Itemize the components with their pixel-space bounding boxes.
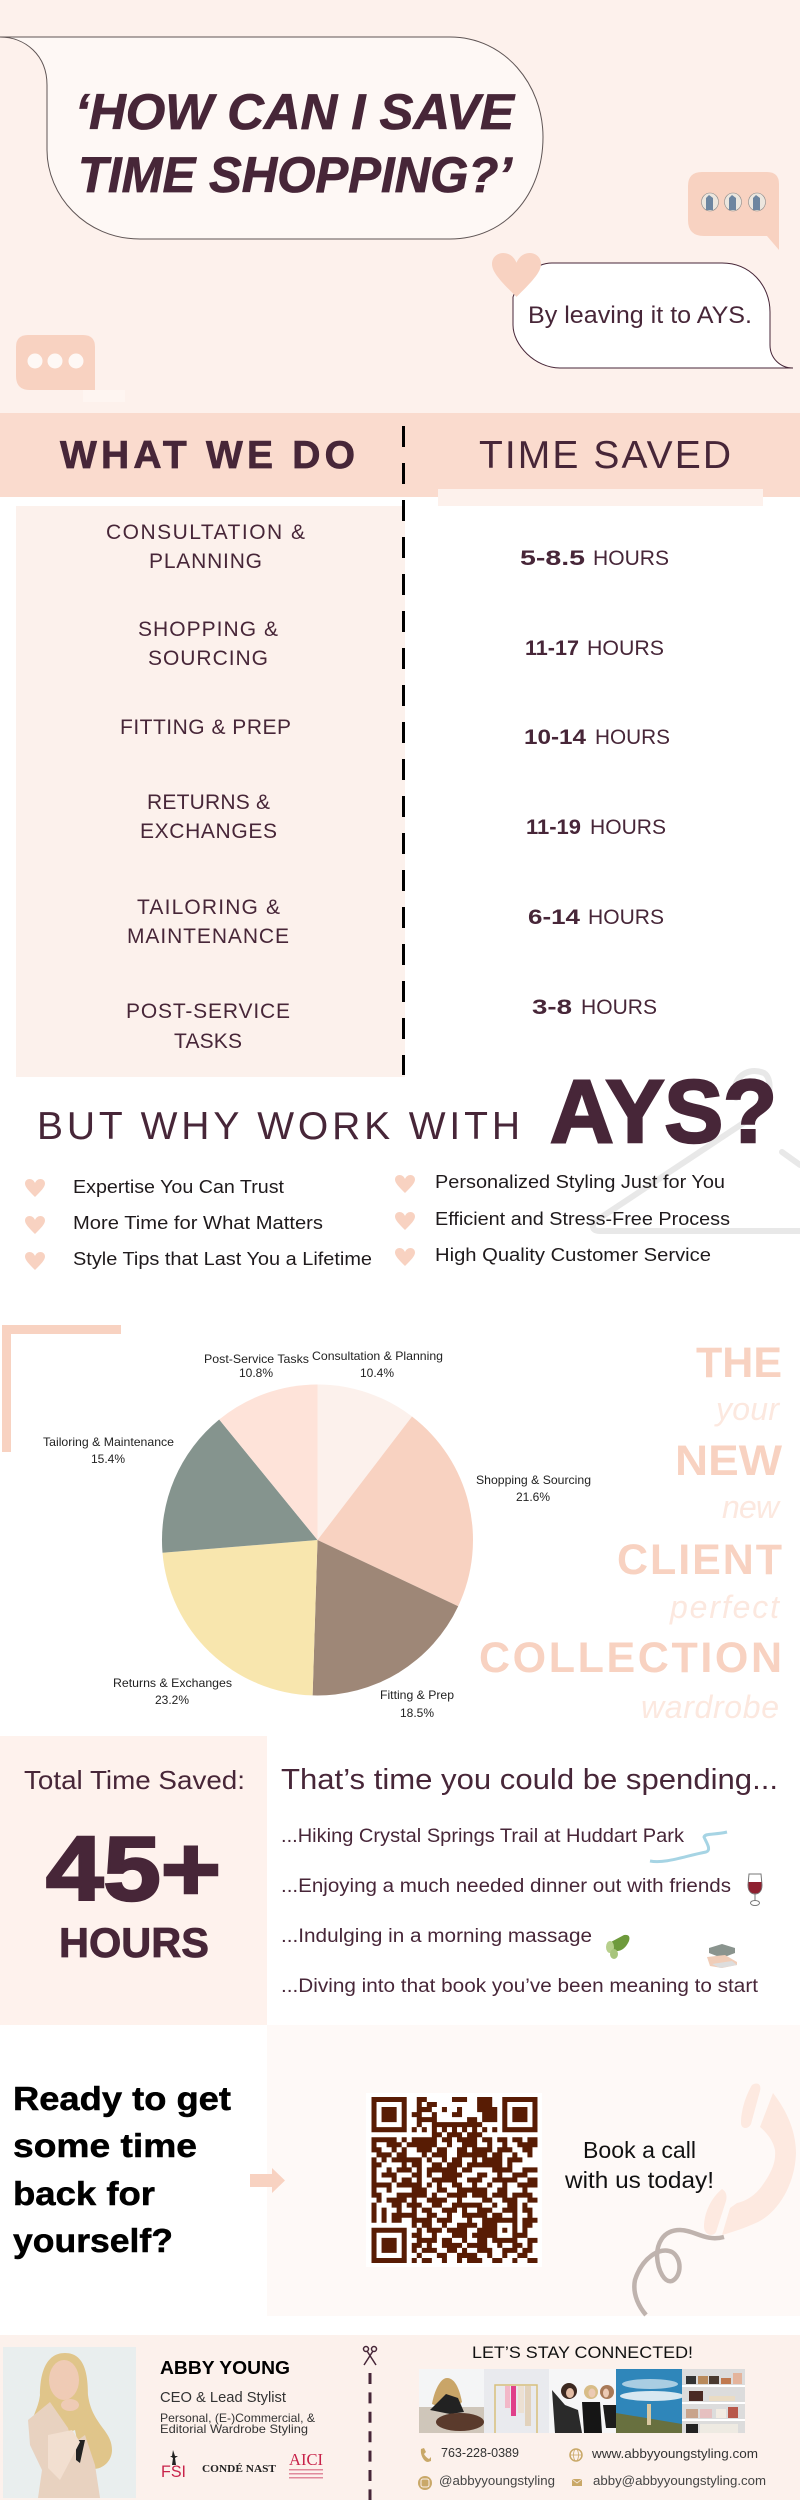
panel: total time saved	[0, 1736, 267, 2025]
text: book a call	[564, 2137, 714, 2193]
text: name and title: Editorial Wardrobe Styling	[160, 2422, 308, 2436]
heading: but why work with: BUT WHY WORK WITH	[37, 1105, 520, 1148]
service: post-service: TASKS	[174, 1030, 242, 1053]
icon: large heart	[492, 253, 541, 297]
speech bubble: main title	[0, 37, 543, 239]
service: shopping: SOURCING	[148, 647, 268, 670]
list: activities: ...Diving into that book you’ve been meaning to start	[281, 1976, 759, 1997]
service: tailoring	[127, 896, 289, 948]
pie labels: Post-Service Tasks	[204, 1352, 309, 1366]
hours: shopping: HOURS	[587, 637, 664, 660]
pie labels: Consultation & Planning	[312, 1349, 443, 1363]
contact: phone: 763-228-0389	[441, 2445, 519, 2460]
contact: phone	[421, 2445, 519, 2462]
hours: tailoring	[528, 906, 664, 929]
icon: telephone cord	[634, 2230, 724, 2315]
stat: 45+: 45+	[46, 1819, 221, 1920]
call to action text: Ready to get	[13, 2080, 231, 2117]
service: shopping	[138, 618, 278, 670]
icon: telephone handset	[704, 2083, 796, 2235]
hours: post-service: HOURS	[581, 996, 657, 1019]
text block: the new client collection: CLIENT	[617, 1536, 782, 1584]
hours: fitting: HOURS	[595, 726, 670, 749]
speech bubble: answer	[513, 263, 793, 368]
reason 4: Personalized Styling Just for You	[435, 1172, 725, 1192]
pie labels: 15.4%	[91, 1452, 125, 1466]
text block: the new client collection: COLLECTION	[479, 1634, 782, 1682]
contact: website: www.abbyyoungstyling.com	[591, 2446, 758, 2461]
hours: fitting	[524, 726, 670, 749]
hours: returns: HOURS	[590, 816, 666, 839]
icon: wine glass	[748, 1874, 762, 1906]
service: consultation: CONSULTATION &	[106, 521, 305, 544]
hours: tailoring: 6-14	[528, 906, 580, 929]
icon: scissors	[364, 2346, 376, 2365]
panel: hero background	[0, 0, 800, 413]
service: post-service	[126, 1000, 290, 1053]
text block: the new client collection: wardrobe	[641, 1689, 779, 1725]
heading: AYS: AYS?	[550, 1061, 777, 1161]
icon: books	[707, 1944, 737, 1968]
qr code	[366, 2093, 542, 2267]
hours: shopping	[525, 637, 664, 660]
title: TIME SHOPPING?’	[78, 147, 513, 203]
call to action text: some time	[13, 2127, 197, 2164]
pie labels: Fitting & Prep	[380, 1688, 454, 1702]
photo: stylist with dog	[419, 2369, 484, 2433]
photo: shoe shelves	[682, 2369, 745, 2433]
text block: the new client collection: new	[722, 1489, 781, 1525]
panel: qr background	[267, 2025, 800, 2316]
list: activities	[281, 1826, 759, 1997]
photo: group selfie	[549, 2369, 616, 2433]
decorative bracket	[2, 1325, 121, 1452]
service: fitting: FITTING & PREP	[120, 716, 291, 739]
reason 5: Efficient and Stress-Free Process	[435, 1209, 730, 1229]
text block: the new client collection: your	[714, 1391, 780, 1427]
contact: instagram: @abbyyoungstyling	[439, 2473, 555, 2488]
list: reasons	[25, 1172, 730, 1270]
title	[75, 84, 516, 203]
pie labels: Tailoring & Maintenance	[43, 1435, 174, 1449]
service: consultation: PLANNING	[149, 550, 262, 573]
reason 3: Style Tips that Last You a Lifetime	[73, 1249, 372, 1269]
pie labels: 10.8%	[239, 1366, 273, 1380]
text: book a call: Book a call	[583, 2137, 696, 2163]
service: tailoring: TAILORING &	[137, 896, 280, 919]
hours: consultation: HOURS	[593, 547, 669, 570]
photo strip	[419, 2369, 745, 2433]
logo: AICI: AICI	[289, 2450, 323, 2469]
logo: FSI	[161, 2450, 186, 2481]
hours: post-service	[532, 996, 657, 1019]
pie labels: Returns & Exchanges	[113, 1676, 232, 1690]
list: activities: ...Hiking Crystal Springs Trail at Huddart Park	[281, 1826, 685, 1847]
column: hours saved	[520, 547, 670, 1019]
text block: the new client collection: THE	[696, 1339, 782, 1387]
pie labels: 21.6%	[516, 1490, 550, 1504]
speech bubble: answer: By leaving it to AYS.	[528, 302, 752, 329]
panel: table header band	[0, 413, 800, 506]
text: name and title: Personal, (E-)Commercial, &	[160, 2411, 315, 2425]
service: consultation	[106, 521, 305, 573]
call to action text	[13, 2080, 231, 2259]
service: returns: RETURNS &	[147, 791, 270, 814]
pie labels: 23.2%	[155, 1693, 189, 1707]
icon: chat bubble with photo dots	[688, 172, 779, 250]
list: activities: ...Indulging in a morning massage	[281, 1926, 592, 1947]
hours: fitting: 10-14	[524, 726, 586, 749]
call to action text: yourself?	[13, 2222, 173, 2259]
text: name and title: CEO & Lead Stylist	[160, 2389, 287, 2406]
panel: footer background	[0, 2335, 800, 2500]
heading: time saved: TIME SAVED	[479, 434, 731, 477]
call to action text: back for	[13, 2175, 155, 2212]
logo: Conde Nast: CONDÉ NAST	[202, 2463, 276, 2475]
hours: consultation: 5-8.5	[520, 547, 585, 570]
icon: river trail	[650, 1832, 727, 1862]
list: activities: ...Enjoying a much needed dinner out with friends	[281, 1876, 731, 1897]
text block: the new client collection: perfect	[669, 1589, 780, 1625]
panel: total time saved: Total Time Saved:	[24, 1765, 245, 1795]
text: name and title	[160, 2358, 315, 2436]
heading: what we do: WHAT WE DO	[60, 434, 355, 477]
text: book a call: with us today!	[564, 2167, 714, 2193]
hours: consultation	[520, 547, 669, 570]
arrow	[250, 2168, 285, 2193]
title: ‘HOW CAN I SAVE	[75, 84, 516, 140]
pie chart	[43, 1349, 591, 1720]
hours: post-service: 3-8	[532, 996, 572, 1019]
service: shopping: SHOPPING &	[138, 618, 278, 641]
hours: returns	[526, 816, 666, 839]
stat label: hours: HOURS	[59, 1919, 209, 1966]
pie labels: 18.5%	[400, 1706, 434, 1720]
panel: services list	[16, 506, 405, 1077]
hours: returns: 11-19	[526, 816, 581, 839]
hours: tailoring: HOURS	[588, 906, 664, 929]
logo: AICI	[289, 2450, 323, 2478]
pie labels: Shopping & Sourcing	[476, 1473, 591, 1487]
service: tailoring: MAINTENANCE	[127, 925, 289, 948]
reason 6: High Quality Customer Service	[435, 1245, 711, 1265]
photo: person under sky	[616, 2369, 684, 2433]
text block: the new client collection: NEW	[675, 1437, 782, 1485]
reason 2: More Time for What Matters	[73, 1213, 323, 1233]
icon: typing bubble	[16, 335, 125, 402]
photo: Abby Young portrait	[3, 2347, 136, 2498]
service: post-service: POST-SERVICE	[126, 1000, 290, 1023]
hours: shopping: 11-17	[525, 637, 579, 660]
icon: hanger	[593, 1071, 800, 1231]
pie labels: 10.4%	[360, 1366, 394, 1380]
service: returns: EXCHANGES	[140, 820, 277, 843]
reason 1: Expertise You Can Trust	[73, 1177, 284, 1197]
heading: stay connected: LET’S STAY CONNECTED!	[472, 2343, 693, 2362]
service: returns	[140, 791, 277, 843]
photo: clothing rack	[484, 2369, 549, 2433]
icon: cucumber	[606, 1935, 629, 1959]
contact: email: abby@abbyyoungstyling.com	[593, 2473, 766, 2488]
pie labels	[43, 1349, 591, 1720]
text: name and title: ABBY YOUNG	[160, 2358, 290, 2378]
logo: FSI: FSI	[161, 2462, 186, 2481]
text block: the new client collection	[479, 1339, 782, 1725]
heading: time spending: That’s time you could be spending...	[281, 1764, 778, 1796]
